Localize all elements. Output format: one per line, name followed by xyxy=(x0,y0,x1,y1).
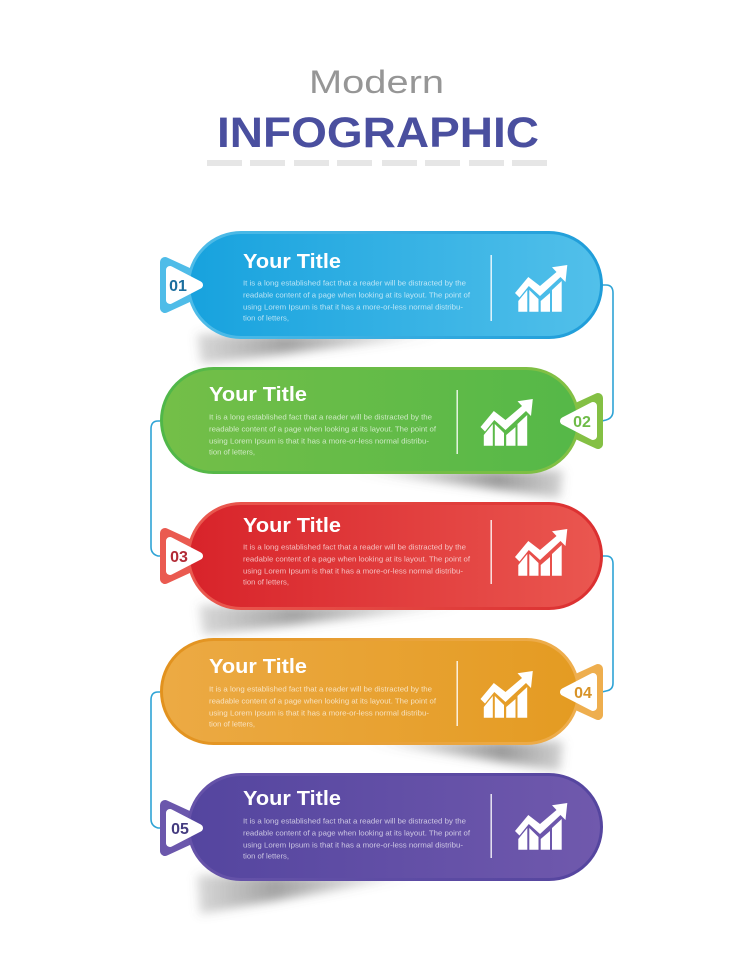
text block: step 05: readable content of a page when looking at its layout. The point of xyxy=(243,828,471,838)
text block: step 04 xyxy=(209,684,437,728)
panel: step 04 xyxy=(162,640,598,771)
badge backing: step 01 xyxy=(165,262,215,308)
dashed title underline xyxy=(207,160,547,166)
icon: growth chart xyxy=(515,265,567,312)
heading: step 03: Your Title xyxy=(243,515,341,537)
heading: step 02: Your Title xyxy=(209,384,307,406)
card: step 01 xyxy=(188,232,602,338)
badge: 02 xyxy=(564,406,593,436)
shadow: step 05 xyxy=(197,875,420,914)
text block: step 01: using Lorem Ipsum is that it has a more-or-less normal distribu- xyxy=(243,302,464,312)
badge: 05: 05 xyxy=(171,821,189,838)
text block: step 01: tion of letters, xyxy=(243,314,289,322)
title: INFOGRAPHIC: INFOGRAPHIC xyxy=(217,109,539,157)
heading: step 05: Your Title xyxy=(243,788,341,810)
text block: step 02: readable content of a page when looking at its layout. The point of xyxy=(209,424,437,434)
shadow: step 04 xyxy=(360,741,563,771)
badge: 04 xyxy=(564,677,593,707)
text block: step 04: using Lorem Ipsum is that it has a more-or-less normal distribu- xyxy=(209,708,430,718)
badge backing: step 02 xyxy=(548,398,598,444)
text block: step 03: tion of letters, xyxy=(243,578,289,586)
icon: growth chart xyxy=(480,671,533,718)
text block: step 04: tion of letters, xyxy=(209,720,255,728)
icon: growth chart xyxy=(515,803,567,850)
shadow: step 02 xyxy=(345,470,563,498)
card: step 05 xyxy=(188,774,602,880)
shadow: step 03 xyxy=(199,605,470,635)
heading: step 04: Your Title xyxy=(209,656,307,678)
text block: step 03 xyxy=(243,542,471,586)
text block: step 05 xyxy=(243,816,471,860)
text block: step 01: It is a long established fact that a reader will be distracted by the xyxy=(243,278,466,288)
card: step 03 xyxy=(188,504,602,608)
text block: step 04: It is a long established fact that a reader will be distracted by the xyxy=(209,684,432,694)
badge: 04: 04 xyxy=(574,685,592,702)
text block: step 01: readable content of a page when looking at its layout. The point of xyxy=(243,290,471,300)
text block: step 04: readable content of a page when looking at its layout. The point of xyxy=(209,696,437,706)
text block: step 03: readable content of a page when looking at its layout. The point of xyxy=(243,554,471,564)
card: step 04 xyxy=(162,640,578,744)
connector lines between steps xyxy=(151,285,613,828)
panel: step 01 xyxy=(165,232,602,364)
badge: 03: 03 xyxy=(170,549,188,566)
text block: step 03: It is a long established fact that a reader will be distracted by the xyxy=(243,542,466,552)
badge: 01 xyxy=(169,270,199,300)
text block: step 02: using Lorem Ipsum is that it has a more-or-less normal distribu- xyxy=(209,436,430,446)
text block: step 05: tion of letters, xyxy=(243,852,289,860)
text block: step 02: tion of letters, xyxy=(209,448,255,456)
icon: growth chart xyxy=(515,529,567,576)
badge backing: step 05 xyxy=(165,805,215,851)
icon: growth chart xyxy=(480,399,533,446)
badge backing: step 04 xyxy=(548,669,598,715)
text block: step 03: using Lorem Ipsum is that it has a more-or-less normal distribu- xyxy=(243,566,464,576)
title: Modern: Modern xyxy=(309,64,444,100)
heading: step 01: Your Title xyxy=(243,251,341,273)
shadow: step 01 xyxy=(197,334,450,364)
panel: step 03 xyxy=(165,504,602,635)
text block: step 05: It is a long established fact that a reader will be distracted by the xyxy=(243,816,466,826)
badge: 03 xyxy=(170,541,199,571)
text block: step 02 xyxy=(209,412,437,456)
text block: step 05: using Lorem Ipsum is that it has a more-or-less normal distribu- xyxy=(243,840,464,850)
card: step 02 xyxy=(162,368,578,472)
panel: step 02 xyxy=(162,368,598,498)
text block: step 02: It is a long established fact that a reader will be distracted by the xyxy=(209,412,432,422)
panel: step 05 xyxy=(165,774,602,914)
badge: 01: 01 xyxy=(169,278,187,295)
badge: 02: 02 xyxy=(573,414,591,431)
badge backing: step 03 xyxy=(165,533,215,579)
text block: step 01 xyxy=(243,278,471,322)
badge: 05 xyxy=(170,813,199,843)
